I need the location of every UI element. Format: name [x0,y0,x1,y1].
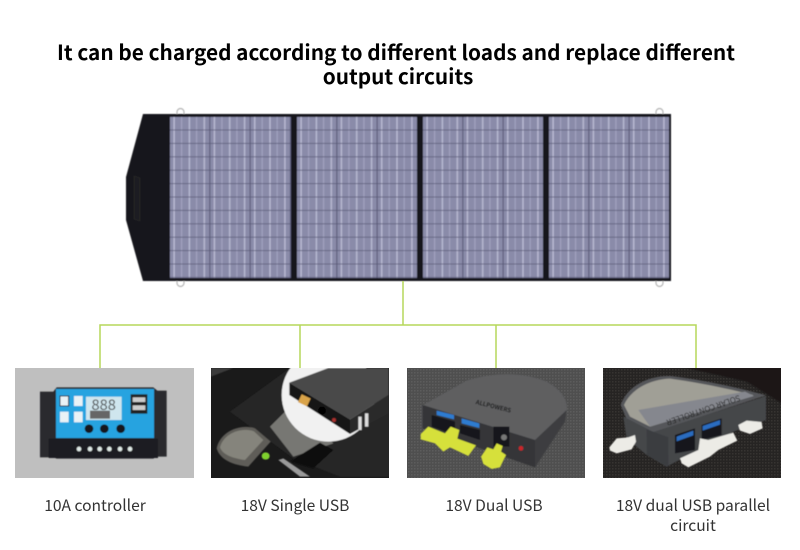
dc port [493,427,509,447]
label: 18V Dual USB: 18V Dual USB [445,494,543,516]
mesh pocket [290,443,333,468]
label band [638,392,754,427]
product photo: 18V Dual USB [407,368,585,478]
product photo: 18V dual USB parallel circuit [603,368,782,478]
fabric sheet [230,368,390,477]
usb ports [675,428,695,453]
red indicator [519,446,523,451]
cable plug [278,458,310,477]
product photo: 18V Single USB [211,368,389,478]
icon: carrying loops [177,108,663,286]
dark cloth [687,368,782,403]
label: 18V dual USB parallel circuit: 18V dual USB parallel [616,494,770,516]
yellow dc plug [481,443,506,469]
panel segment 2 [297,117,417,278]
magnifier [280,368,374,442]
usb ports [432,415,456,432]
light beam [270,412,334,457]
label: 18V Single USB: 18V Single USB [241,494,349,516]
title: output circuits [323,60,473,90]
connector lines [100,281,696,368]
controller body [40,387,167,459]
device front [623,396,766,467]
product photo: 10A controller [15,368,194,478]
panel segment 1 [170,117,291,278]
title [57,36,735,90]
device rim [621,376,766,433]
device side [535,410,567,467]
solar panel [126,108,671,286]
device top [423,374,567,442]
panel segment 3 [423,117,543,278]
product photo: 10A controller: 888 [91,394,116,415]
device top [624,379,753,427]
panel segment 4 [549,117,669,278]
product photo: 18V dual USB parallel circuit: SOLAR CONTROLLER [665,392,742,428]
label: 10A controller: 10A controller [44,494,147,516]
flap handle [134,176,140,221]
green cap [262,452,270,460]
yellow usb plug [421,427,476,456]
label: 18V dual USB parallel circuit: circuit [670,514,716,536]
product photo: 18V Dual USB: ALLPOWERS [474,397,512,415]
device front [423,405,535,467]
white plugs [609,435,636,453]
title: It can be charged according to different loads and replace different [57,36,735,66]
round module [217,427,271,467]
label: 18V dual USB parallel circuit [616,494,770,536]
black pouch flap [126,114,671,281]
